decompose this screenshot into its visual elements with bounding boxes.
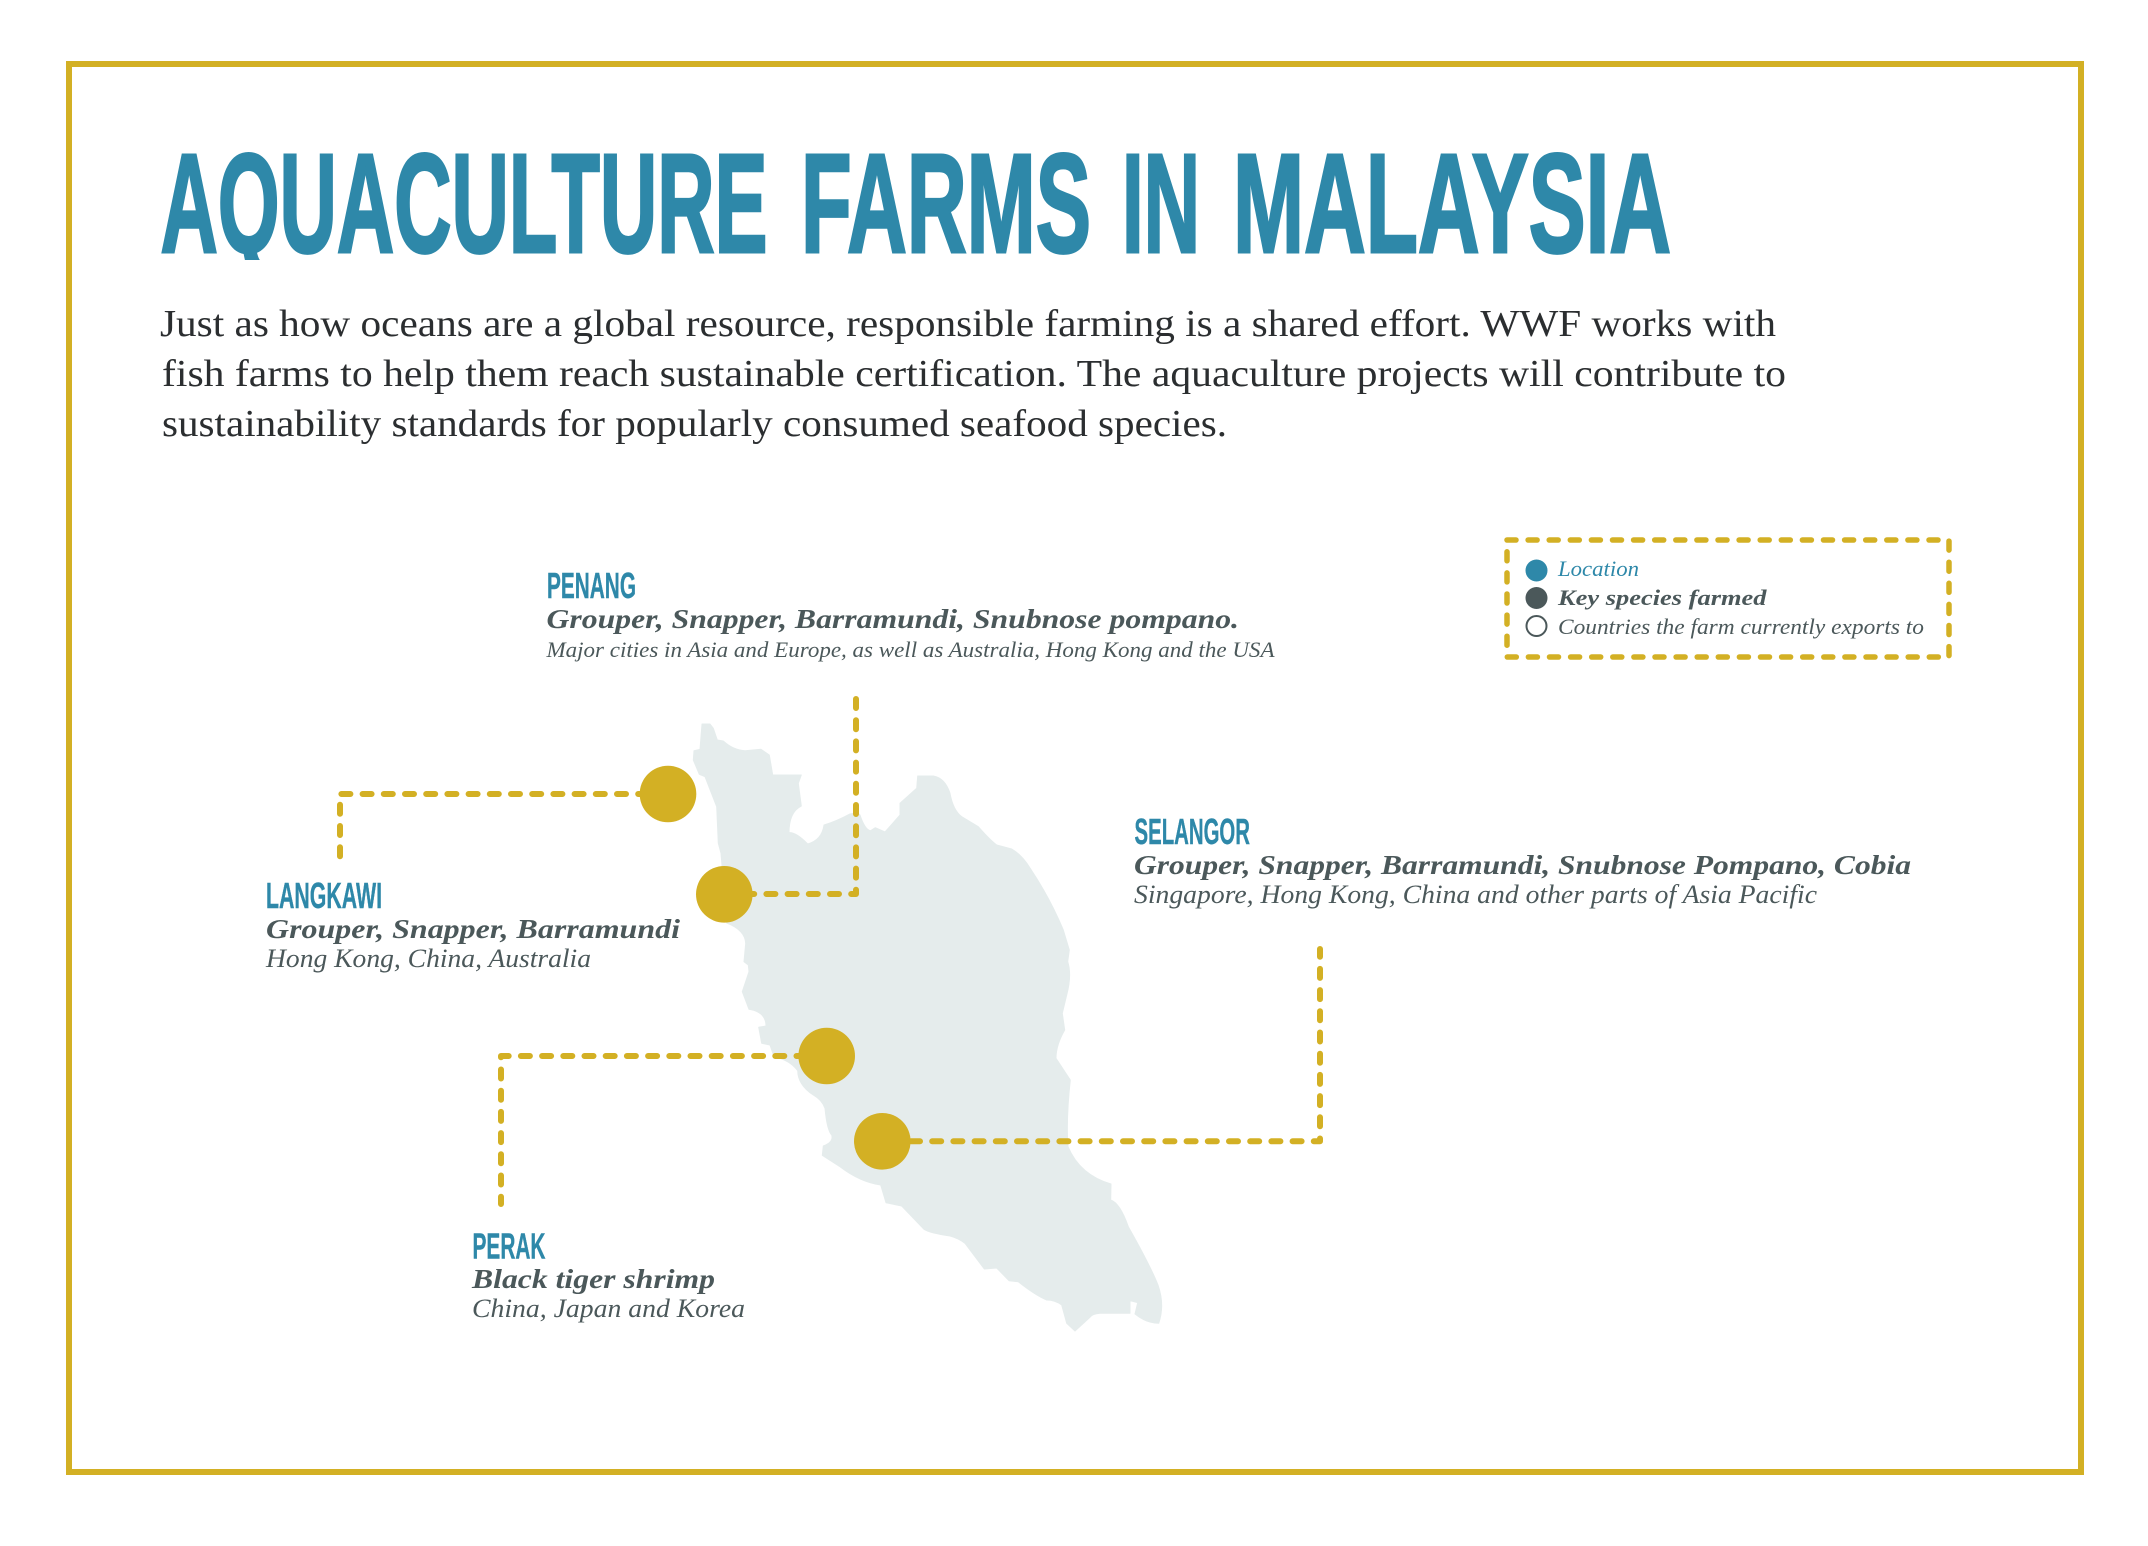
- map of peninsular Malaysia: [693, 724, 1162, 1331]
- intro paragraph: sustainability standards for popularly consumed seafood species.: [162, 403, 1227, 445]
- location marker: Perak: [798, 1028, 855, 1084]
- connector: Perak: [501, 1056, 806, 1204]
- callout: Selangor: SELANGOR: [1134, 811, 1250, 852]
- intro paragraph: [160, 303, 1786, 445]
- callout: Perak: PERAK: [472, 1226, 546, 1266]
- callout: Penang: Major cities in Asia and Europe, as well as Australia, Hong Kong and the USA: [545, 637, 1275, 662]
- title: MALAYSIA: [1233, 124, 1671, 282]
- callout: Perak: [471, 1226, 745, 1323]
- connector: Penang: [745, 699, 856, 894]
- legend: [1507, 540, 1949, 657]
- legend item: key species farmed: Key species farmed: [1557, 585, 1768, 610]
- callout: Penang: Grouper, Snapper, Barramundi, Snubnose pompano.: [546, 604, 1239, 634]
- title: FARMS: [801, 124, 1091, 282]
- callout: Penang: PENANG: [547, 565, 636, 606]
- callout: Perak: Black tiger shrimp: [471, 1264, 715, 1294]
- connector: Langkawi: [340, 794, 647, 857]
- callout: Perak: China, Japan and Korea: [472, 1294, 745, 1323]
- intro paragraph: Just as how oceans are a global resource, responsible farming is a shared effort. WWF works with: [160, 303, 1776, 345]
- callout: Langkawi: Hong Kong, China, Australia: [265, 944, 591, 973]
- intro paragraph: fish farms to help them reach sustainable certification. The aquaculture projects will contribute to: [162, 353, 1786, 395]
- title: AQUACULTURE: [160, 124, 768, 282]
- connector: Selangor: [911, 949, 1320, 1141]
- title: IN: [1122, 124, 1200, 282]
- callout: Penang: [545, 565, 1275, 662]
- legend item: location: [1526, 556, 1639, 582]
- callout: Langkawi: [265, 875, 681, 973]
- legend item: location: Location: [1557, 556, 1639, 581]
- title: [161, 152, 1670, 260]
- callout: Selangor: Grouper, Snapper, Barramundi, Snubnose Pompano, Cobia: [1134, 850, 1911, 880]
- callout: Selangor: [1134, 811, 1911, 909]
- callout: Selangor: Singapore, Hong Kong, China and other parts of Asia Pacific: [1134, 880, 1817, 909]
- location marker: Penang: [696, 866, 753, 923]
- callout: Langkawi: LANGKAWI: [266, 875, 382, 916]
- location marker: Selangor: [854, 1113, 911, 1170]
- callout: Langkawi: Grouper, Snapper, Barramundi: [266, 914, 681, 944]
- location marker: Langkawi: [640, 766, 696, 822]
- legend item: export countries: Countries the farm currently exports to: [1558, 614, 1924, 639]
